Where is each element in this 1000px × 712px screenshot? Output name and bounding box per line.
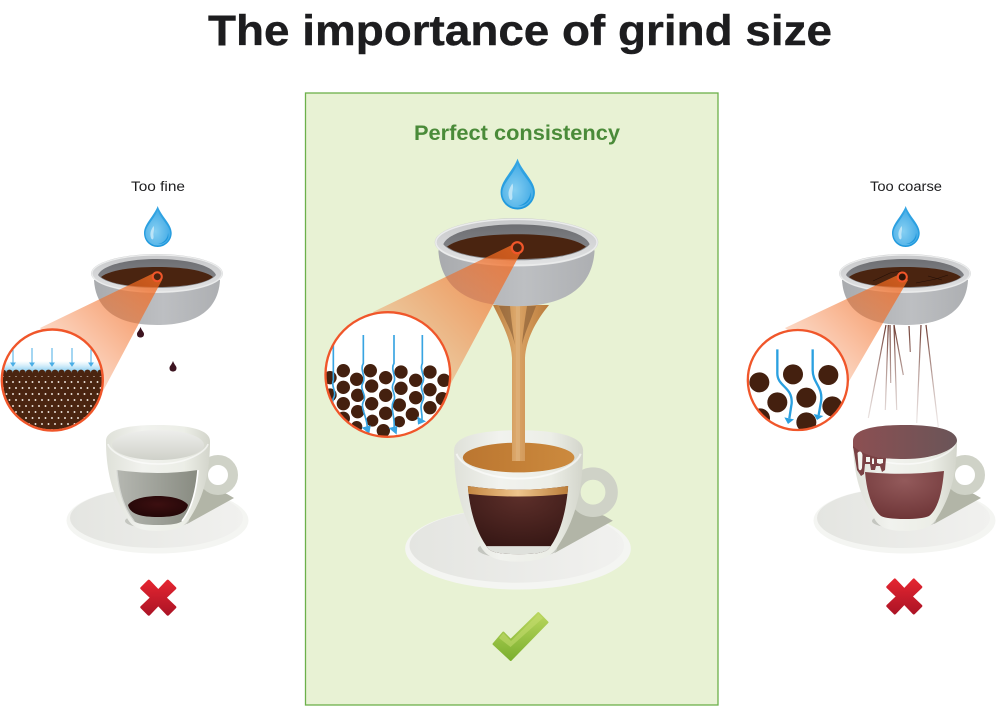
- icon: green check mark: [494, 613, 548, 660]
- title: The importance of grind size: [208, 7, 832, 55]
- grains: [749, 364, 842, 432]
- cup window with espresso: [468, 486, 568, 554]
- magnifier cone: too coarse: [785, 273, 908, 383]
- water paths: [333, 335, 424, 428]
- panel: perfect consistency background: [306, 93, 718, 705]
- focus dot: too coarse: [898, 272, 907, 282]
- heading: too fine: Too fine: [131, 179, 185, 194]
- thin jets of coffee running through coarse grounds: [868, 325, 938, 427]
- magnified circle: coarse grains with water running straight through: [748, 330, 848, 432]
- magnifier cone: perfect: [373, 244, 520, 387]
- focus dot: perfect: [512, 242, 523, 253]
- magnified circle: medium grains with water flowing between: [323, 312, 451, 437]
- magnifier cone: too fine: [40, 273, 162, 393]
- icon: water drop, perfect: [501, 159, 535, 209]
- cup interior: [112, 430, 204, 460]
- coffee basket: too coarse: [839, 254, 971, 325]
- cup window with watery coffee: [865, 471, 944, 519]
- icon: water drop, too fine: [144, 206, 172, 247]
- icon: water drop, too coarse: [892, 206, 920, 247]
- heading: too coarse: Too coarse: [870, 179, 942, 194]
- magnified circle: fine grains packed tight, water barely passes: [0, 330, 104, 433]
- icon: red cross, too coarse: [888, 580, 921, 613]
- drips: too few coffee drops: [137, 327, 176, 372]
- coffee basket: too fine: [91, 254, 223, 325]
- cup: too coarse, thin watery coffee: [814, 425, 996, 554]
- coffee basket: perfect: [435, 218, 598, 306]
- heading: perfect consistency: Perfect consistency: [414, 122, 620, 145]
- cup: too fine, nearly empty: [66, 425, 248, 554]
- water paths: [777, 349, 821, 418]
- cup: perfect espresso: [405, 430, 631, 590]
- grains: [323, 364, 451, 437]
- cracks in the coffee puck: [873, 271, 948, 283]
- stream of coffee pouring into cup: [493, 305, 549, 461]
- focus dot: too fine: [153, 272, 162, 281]
- watery coffee surface: [853, 425, 957, 459]
- crema surface: [463, 443, 574, 472]
- icon: red cross, too fine: [142, 581, 175, 614]
- drips over rim: [853, 446, 886, 476]
- cup window with small coffee amount: [117, 470, 198, 525]
